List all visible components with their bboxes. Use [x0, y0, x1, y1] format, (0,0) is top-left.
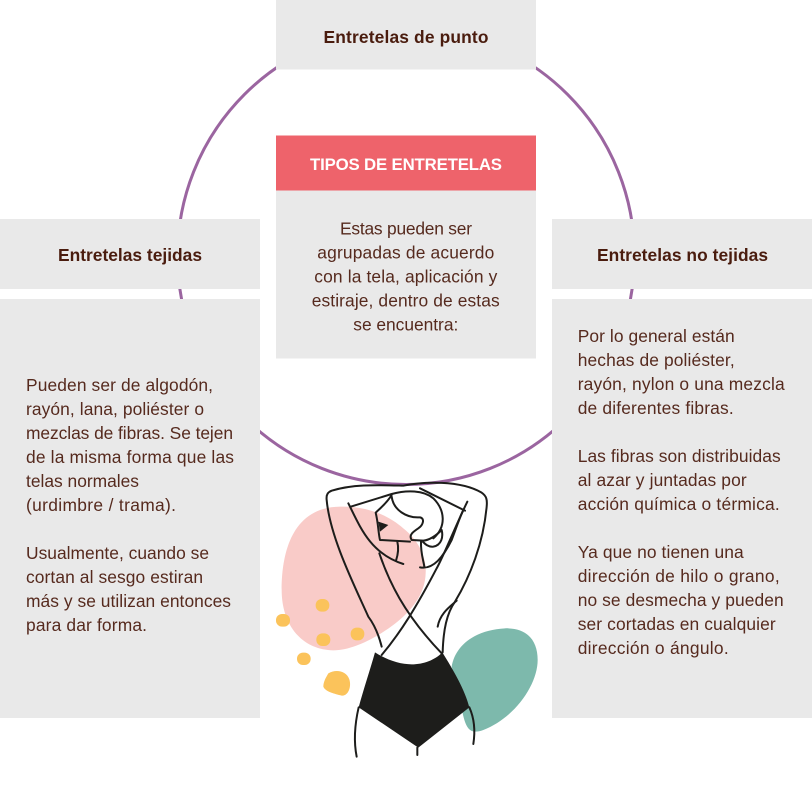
green blob — [452, 628, 538, 732]
heading: entretelas no tejidas — [552, 219, 812, 289]
text block: entretelas tejidas: de la misma forma que las — [26, 447, 234, 467]
panel: tipos de entretelas — [276, 136, 536, 358]
description box: se encuentra: — [353, 314, 458, 334]
text block: entretelas tejidas — [0, 299, 260, 718]
banner: tipos de entretelas — [276, 136, 536, 190]
text block: entretelas no tejidas: Por lo general están — [578, 326, 735, 346]
text block: entretelas tejidas: más y se utilizan entonces — [26, 591, 231, 611]
text block: entretelas no tejidas — [552, 299, 812, 718]
pink blob — [282, 507, 426, 650]
description box — [276, 190, 536, 358]
text block: entretelas tejidas: (urdimbre / trama). — [26, 495, 176, 515]
text block: entretelas no tejidas: no se desmecha y pueden — [578, 590, 784, 610]
description box: estiraje, dentro de estas — [312, 290, 500, 310]
illustration: woman in black bodysuit — [276, 483, 538, 757]
heading: entretelas no tejidas: Entretelas no tejidas — [597, 245, 768, 265]
description box: agrupadas de acuerdo — [317, 242, 494, 262]
figure outline — [327, 483, 487, 757]
black bodysuit — [359, 652, 469, 748]
text block: entretelas no tejidas: de diferentes fibras. — [578, 398, 734, 418]
description box: con la tela, aplicación y — [314, 266, 498, 286]
connecting circle — [178, 28, 634, 484]
heading: entretelas tejidas — [0, 219, 260, 289]
heading: entretelas de punto: Entretelas de punto — [324, 27, 488, 47]
text block: entretelas tejidas: mezclas de fibras. Se tejen — [26, 423, 233, 443]
text block: entretelas no tejidas: dirección o ángulo. — [578, 638, 729, 658]
text block: entretelas tejidas: telas normales — [26, 471, 139, 491]
panel: entretelas tejidas — [0, 219, 260, 718]
text block: entretelas no tejidas: hechas de poliéster, — [578, 350, 735, 370]
text block: entretelas no tejidas: ser cortadas en cualquier — [578, 614, 776, 634]
yellow dots — [276, 599, 364, 696]
text block: entretelas no tejidas: al azar y juntadas por — [578, 470, 747, 490]
text block: entretelas tejidas: rayón, lana, poliéster o — [26, 399, 204, 419]
text block: entretelas tejidas: Pueden ser de algodón, — [26, 375, 213, 395]
text block: entretelas no tejidas: rayón, nylon o una mezcla — [578, 374, 785, 394]
heading: entretelas tejidas: Entretelas tejidas — [58, 245, 202, 265]
text block: entretelas tejidas: para dar forma. — [26, 615, 147, 635]
text block: entretelas no tejidas: Ya que no tienen una — [578, 542, 744, 562]
text block: entretelas tejidas: Usualmente, cuando se — [26, 543, 209, 563]
panel: entretelas de punto — [276, 0, 536, 70]
banner: tipos de entretelas: TIPOS DE ENTRETELAS — [310, 155, 502, 174]
description box: Estas pueden ser — [340, 218, 472, 238]
panel: entretelas no tejidas — [552, 219, 812, 718]
text block: entretelas tejidas: cortan al sesgo estiran — [26, 567, 203, 587]
text block: entretelas no tejidas: dirección de hilo o grano, — [578, 566, 780, 586]
text block: entretelas no tejidas: Las fibras son distribuidas — [578, 446, 781, 466]
text block: entretelas no tejidas: acción química o térmica. — [578, 494, 780, 514]
